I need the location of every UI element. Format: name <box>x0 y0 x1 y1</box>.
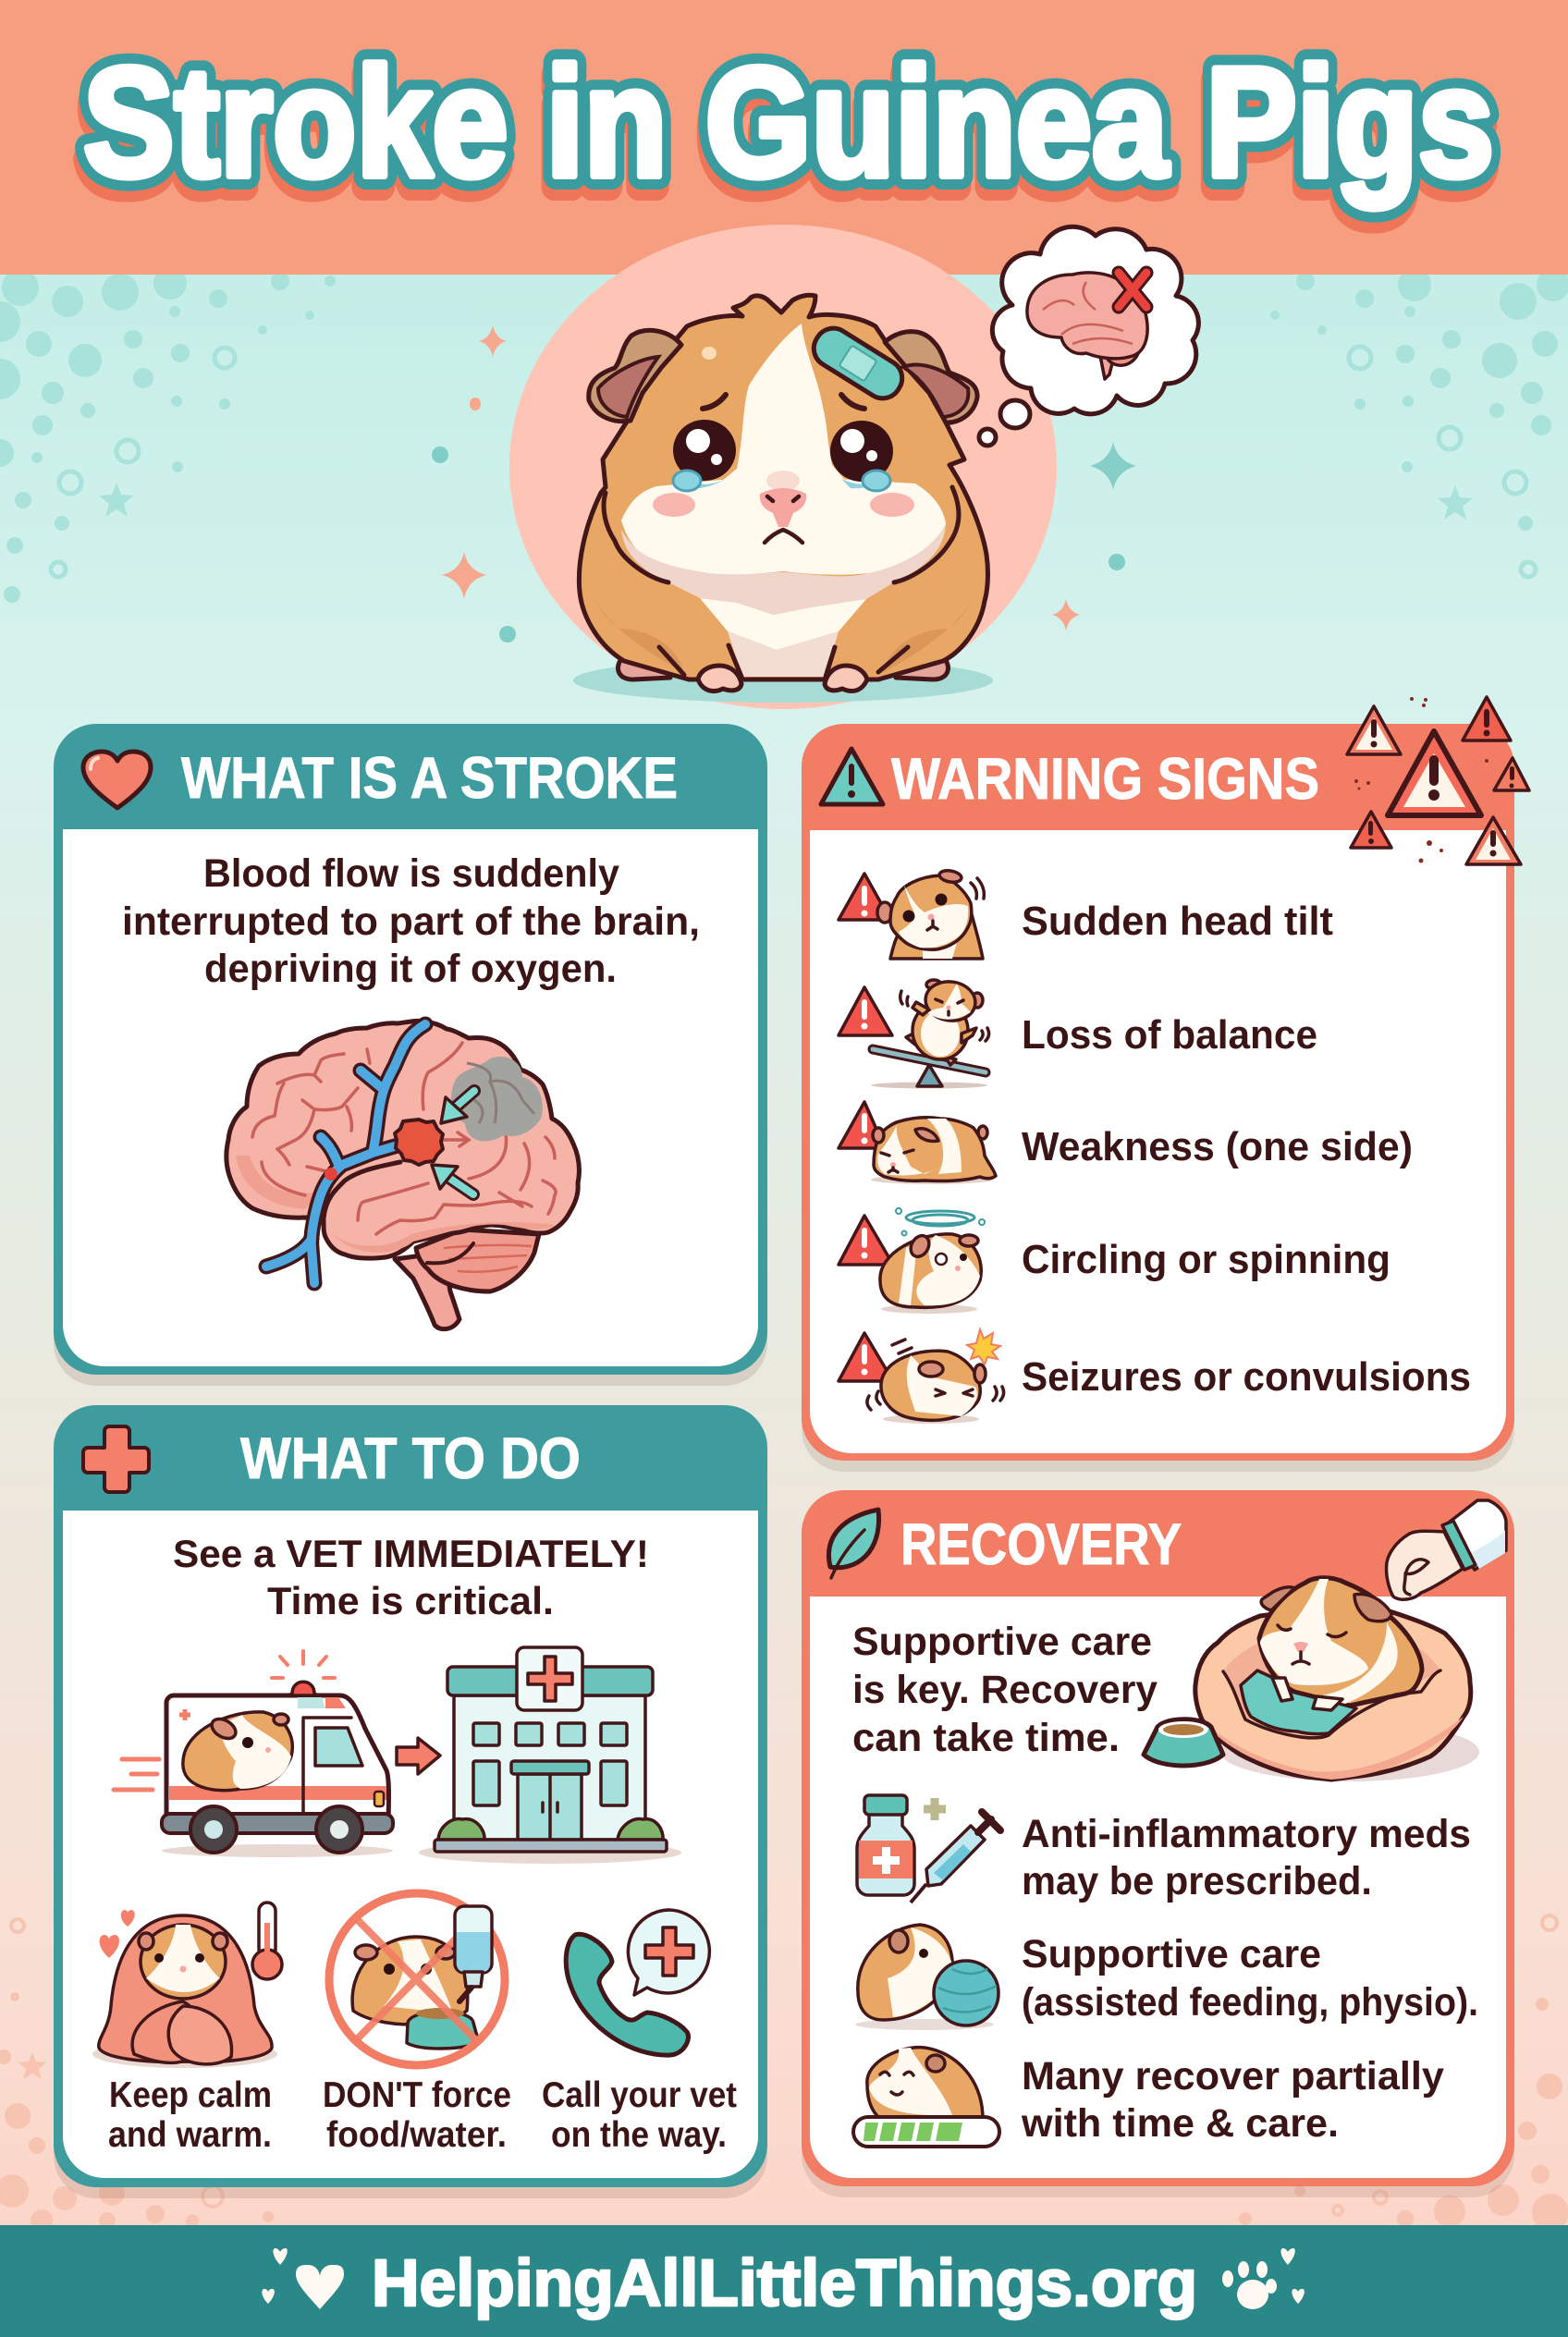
arrow: ambulance to hospital <box>397 1738 440 1774</box>
icon: medical cross <box>83 1426 149 1492</box>
cheeks <box>653 493 914 517</box>
small brain with X <box>1027 273 1147 379</box>
hearts <box>100 1910 135 1958</box>
icon: paw and hearts <box>1222 2248 1305 2309</box>
vet hospital <box>419 1647 681 1864</box>
icon: happy pig on progress bar <box>853 2048 999 2147</box>
siren <box>272 1651 335 1695</box>
tip: keep calm and warm <box>92 1903 282 2068</box>
ischemic area <box>451 1057 543 1141</box>
tip: call your vet <box>566 1910 709 2055</box>
intro text: Supportive care <box>852 1620 1152 1664</box>
tip labels: Keep calm <box>109 2075 272 2115</box>
ambulance <box>114 1651 393 1857</box>
recovery list text: (assisted feeding, physio). <box>1022 1980 1478 2025</box>
eyebrows <box>703 395 864 409</box>
cerebellum <box>416 1230 539 1291</box>
icon: pig with exercise ball <box>855 1925 998 2030</box>
chest band <box>621 523 946 615</box>
icon: heart <box>83 752 151 808</box>
sign labels: Loss of balance <box>1022 1012 1317 1058</box>
forehead highlight <box>702 347 717 360</box>
heading: WHAT TO DO <box>240 1426 581 1491</box>
front bed rim <box>1223 1670 1440 1738</box>
bumper and wheels <box>162 1806 393 1853</box>
shaded flanks <box>592 592 975 673</box>
heading: WARNING SIGNS <box>891 747 1319 812</box>
panel: what to do <box>54 1405 767 2198</box>
sign: seizures or convulsions <box>839 1329 1004 1424</box>
description: depriving it of oxygen. <box>204 947 617 991</box>
warning triangle cluster <box>1347 697 1529 864</box>
icon: leaf <box>829 1510 879 1578</box>
urgent message: Time is critical. <box>267 1579 554 1622</box>
recovery list text: Anti-inflammatory meds <box>1022 1812 1471 1856</box>
upper temporal fold <box>324 1162 400 1218</box>
recovery list text: may be prescribed. <box>1022 1859 1372 1903</box>
tip labels <box>108 2075 737 2155</box>
icon: hearts <box>262 2248 344 2309</box>
sign: weakness one side <box>839 1102 996 1184</box>
sign: loss of balance <box>839 978 989 1089</box>
icon: medication <box>857 1795 1000 1903</box>
urgent message: See a VET IMMEDIATELY! <box>173 1532 649 1575</box>
sign labels <box>1022 899 1471 1400</box>
bandage <box>807 322 909 405</box>
teal pillow <box>1241 1670 1356 1734</box>
icon: teal warning triangle <box>821 749 883 804</box>
brain stem <box>395 1253 459 1329</box>
clot <box>395 1120 443 1165</box>
panel: what is a stroke <box>54 724 767 1386</box>
vet hand <box>1387 1500 1506 1599</box>
recovery list text: Supportive care <box>1022 1932 1321 1976</box>
brain diagram <box>227 1021 579 1329</box>
water bottle <box>455 1906 492 2001</box>
blood vessels <box>266 1024 425 1283</box>
cushion bed <box>1195 1607 1471 1780</box>
tip labels: on the way. <box>551 2115 727 2155</box>
description: Blood flow is suddenly <box>203 851 619 896</box>
thought bubble <box>979 226 1198 446</box>
recovery list text <box>1021 1812 1478 2146</box>
recovery list text: Many recover partially <box>1022 2054 1444 2098</box>
recovery list text: with time & care. <box>1021 2101 1339 2146</box>
white stripe and muzzle <box>717 324 848 485</box>
description: interrupted to part of the brain, <box>122 899 700 944</box>
intro text: is key. Recovery <box>852 1668 1158 1712</box>
tears <box>673 471 890 491</box>
sign labels: Weakness (one side) <box>1022 1124 1413 1169</box>
sign: circling or spinning <box>839 1208 985 1314</box>
intro text <box>852 1620 1158 1760</box>
panel: warning signs <box>802 697 1529 1472</box>
header band <box>0 0 1568 275</box>
tip: do not force food or water <box>329 1893 505 2065</box>
arrows <box>432 1091 474 1194</box>
sleeping pig in bed <box>1144 1578 1479 1781</box>
hero guinea pig <box>573 295 993 703</box>
tip labels: food/water. <box>326 2115 507 2155</box>
nose and mouth <box>760 471 806 543</box>
gyri <box>252 1043 556 1234</box>
description <box>122 851 700 991</box>
panel: recovery <box>802 1490 1514 2197</box>
back feet <box>618 659 949 679</box>
eyes <box>673 420 893 482</box>
tip labels: DON'T force <box>323 2075 511 2115</box>
footer <box>0 2225 1568 2337</box>
seesaw plank <box>873 1049 986 1072</box>
website: HelpingAllLittleThings.org <box>372 2247 1197 2320</box>
intro text: can take time. <box>852 1716 1120 1760</box>
arm lines <box>604 487 959 677</box>
sign: sudden head tilt <box>839 869 984 959</box>
urgent message <box>173 1532 649 1622</box>
sparkles <box>442 325 1136 630</box>
thermometer <box>252 1903 282 1979</box>
front feet <box>698 666 867 691</box>
body <box>579 295 987 679</box>
pig passenger <box>183 1712 292 1791</box>
heading: WHAT IS A STROKE <box>181 746 678 811</box>
sign labels: Circling or spinning <box>1022 1237 1390 1282</box>
tip labels: Call your vet <box>542 2075 737 2115</box>
pink circle behind guinea pig <box>509 225 1057 709</box>
ears <box>589 330 977 422</box>
cerebrum <box>227 1021 579 1258</box>
sign labels: Sudden head tilt <box>1022 899 1333 944</box>
tip labels: and warm. <box>108 2115 272 2155</box>
sign labels: Seizures or convulsions <box>1022 1354 1471 1400</box>
food bowl <box>1144 1719 1223 1766</box>
pig body <box>1259 1578 1422 1706</box>
heading: RECOVERY <box>900 1512 1182 1577</box>
